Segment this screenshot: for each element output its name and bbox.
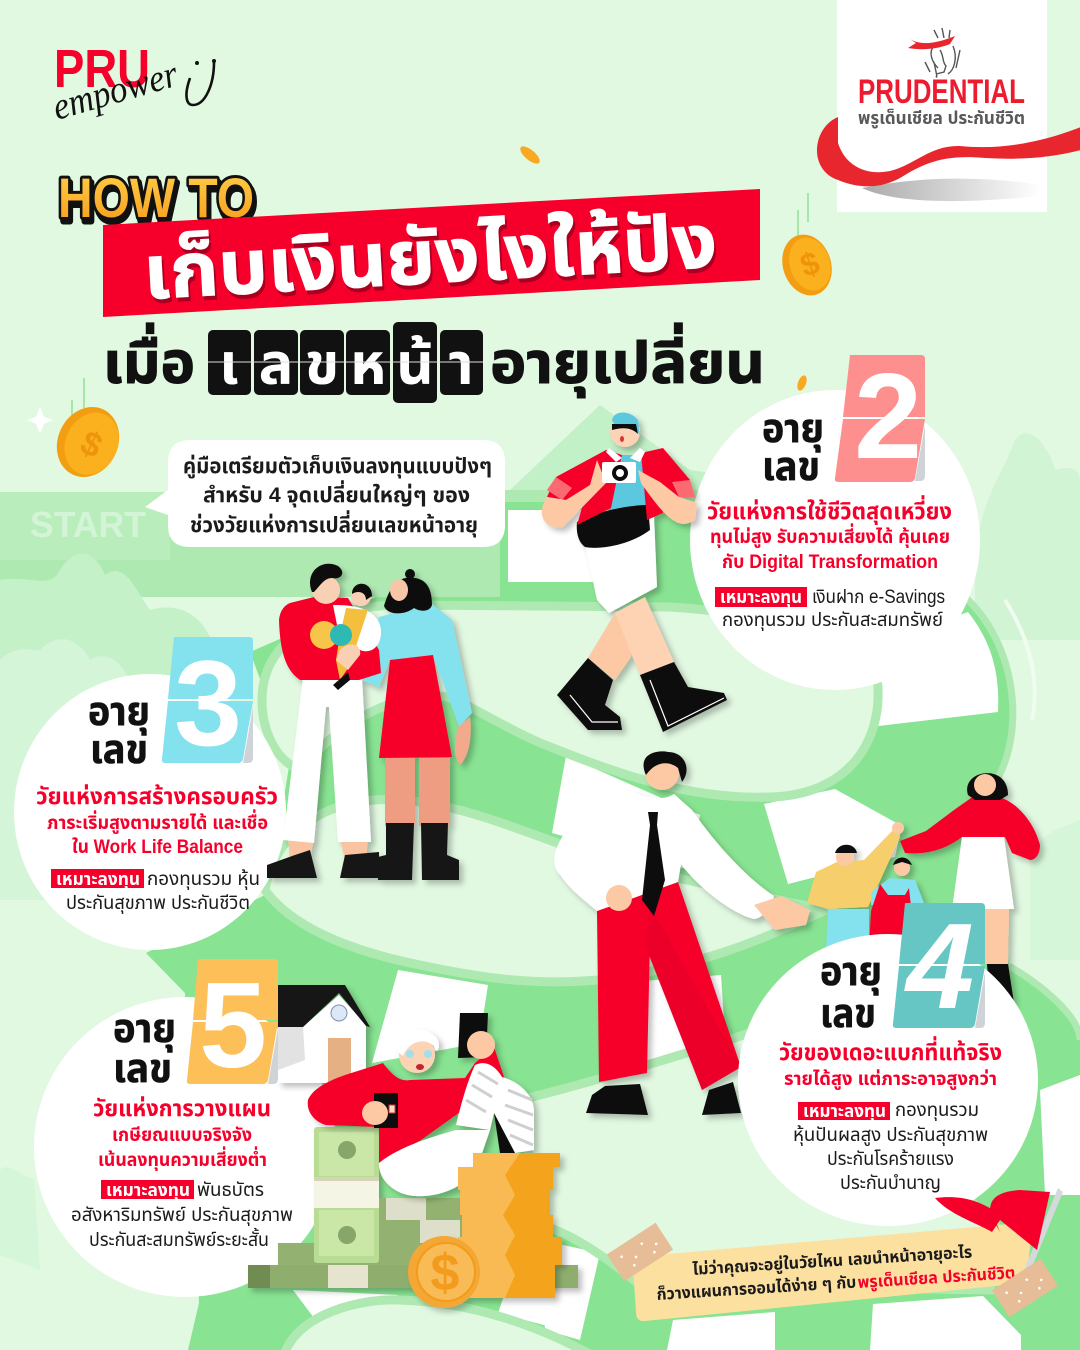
- panel: age 4: อายุ: [820, 950, 882, 996]
- icon: tape right: [992, 1259, 1058, 1317]
- road island lower: [520, 1020, 1000, 1290]
- flip card 2: 2: [854, 348, 922, 484]
- road island upper: [262, 605, 878, 797]
- decorative coins: [27, 143, 839, 487]
- speech bubble: intro: คู่มือเตรียมตัวเก็บเงินลงทุนแบบปังๆ: [183, 455, 492, 479]
- background scenery: mountain, trees and start band: [0, 405, 1080, 1270]
- panel: age 4: เลข: [820, 992, 876, 1036]
- figure: coin stacks: [408, 1153, 562, 1308]
- panel: age 4: กองทุนรวม: [895, 1100, 979, 1121]
- panel: age 4: [779, 898, 1002, 1194]
- panel: age 5: พันธบัตร: [197, 1180, 264, 1201]
- panel: age 5: เกษียณแบบจริงจัง: [112, 1125, 252, 1146]
- figure: woman with two children: [807, 773, 1040, 1003]
- callout: closing banner: ไม่ว่าคุณจะอยู่ในวัยไหน เลขนำหน้าอายุอะไร: [692, 1243, 973, 1280]
- man holding child: [267, 564, 381, 878]
- board game road: [146, 490, 1080, 1350]
- title banner: เก็บเงินยังไงให้ปัง: [141, 199, 719, 316]
- icon: coin left: $: [75, 423, 108, 466]
- panel: age 2: เลข: [762, 445, 820, 489]
- panel: age 4: รายได้สูง แต่ภาระอาจสูงกว่า: [784, 1068, 997, 1090]
- figure: house: [278, 985, 370, 1083]
- panel: age 2: วัยแห่งการใช้ชีวิตสุดเหวี่ยง: [707, 495, 952, 525]
- bubble: age 4: [738, 934, 1038, 1226]
- icon: coin right: $: [796, 244, 824, 284]
- speech bubble: intro: ช่วงวัยแห่งการเปลี่ยนเลขหน้าอายุ: [190, 510, 478, 538]
- logo: PRU empower U: PRU: [54, 39, 150, 99]
- panel: age 3: วัยแห่งการสร้างครอบครัว: [36, 783, 278, 809]
- flip tiles: น้: [396, 332, 434, 397]
- panel: age 5: เน้นลงทุนความเสี่ยงต่ำ: [98, 1146, 267, 1171]
- panel: age 3: เลข: [90, 728, 148, 772]
- panel: age 3: ภาระเริ่มสูงตามรายได้ และเชื่อ: [47, 809, 268, 834]
- icon: upright banknotes: [314, 1127, 379, 1263]
- panel: age 5: เลข: [113, 1047, 172, 1091]
- road island bottom: [283, 1300, 600, 1350]
- callout: closing banner: ก็วางแผนการออมได้ง่าย ๆ กับ: [656, 1273, 857, 1304]
- panel: age 4: ประกันโรคร้ายแรง: [827, 1147, 954, 1170]
- speech bubble: intro: [145, 440, 505, 547]
- panel: age 4: วัยของเดอะแบกที่แท้จริง: [779, 1036, 1002, 1065]
- icon: ribbon: [817, 117, 1080, 201]
- panel: age 3: [36, 635, 278, 914]
- panel: age 3: กองทุนรวม หุ้น: [147, 867, 260, 890]
- panel: age 2: กับ Digital Transformation: [722, 552, 938, 573]
- panel: age 5: ประกันสะสมทรัพย์ระยะสั้น: [89, 1227, 269, 1251]
- panel: age 2: เหมาะลงทุน: [720, 587, 802, 608]
- bubble: age 2: [690, 390, 980, 690]
- subtitle with flip tiles: อายุเปลี่ยน: [490, 322, 765, 398]
- panel: age 2: ทุนไม่สูง รับความเสี่ยงได้ คุ้นเคย: [710, 523, 950, 548]
- bubble: age 3: [14, 674, 286, 950]
- start label: START: [30, 504, 146, 545]
- panel: age 5: อสังหาริมทรัพย์ ประกันสุขภาพ: [71, 1205, 293, 1226]
- flip tiles: ล: [259, 332, 293, 397]
- flip card 5: 5: [199, 957, 267, 1093]
- panel: age 3: ประกันสุขภาพ ประกันชีวิต: [66, 893, 250, 914]
- panel: age 4: ประกันบำนาญ: [840, 1173, 941, 1194]
- panel: age 2: กองทุนรวม ประกันสะสมทรัพย์: [722, 610, 943, 631]
- bubble: age 5: [34, 997, 336, 1297]
- panel: age 3: ใน Work Life Balance: [72, 837, 243, 858]
- panel: age 3: อายุ: [88, 690, 150, 736]
- flip tiles: า: [448, 332, 474, 397]
- panel: age 5: เหมาะลงทุน: [106, 1180, 190, 1201]
- road island middle: [265, 800, 826, 982]
- panel: age 5: [71, 957, 293, 1251]
- panel: age 5: วัยแห่งการวางแผน: [93, 1095, 271, 1121]
- flip card 3: 3: [174, 635, 242, 771]
- callout: closing banner: พรูเด็นเชียล ประกันชีวิต: [857, 1264, 1016, 1293]
- panel: age 2: อายุ: [762, 407, 824, 453]
- icon: red flag: [935, 1188, 1063, 1272]
- speech bubble: intro: สำหรับ 4 จุดเปลี่ยนใหญ่ๆ ของ: [203, 480, 470, 508]
- flip tiles: เ: [219, 332, 239, 397]
- figure: photographer: [542, 412, 727, 732]
- panel: Prudential logo: [817, 0, 1080, 212]
- flip tiles: ข: [305, 332, 339, 397]
- figure: money stacks: [248, 1127, 578, 1288]
- subtitle with flip tiles: [103, 322, 765, 403]
- subtitle with flip tiles: เมื่อ: [103, 322, 195, 396]
- icon: coin left: [46, 397, 130, 487]
- panel: Prudential logo: พรูเด็นเชียล ประกันชีวิต: [858, 108, 1025, 129]
- flip card 4: 4: [903, 898, 974, 1034]
- callout: closing banner: [607, 1188, 1063, 1321]
- panel: age 4: เหมาะลงทุน: [803, 1101, 886, 1122]
- figure: office man: [554, 751, 810, 1115]
- panel: Prudential logo: PRUDENTIAL: [858, 73, 1025, 111]
- panel: age 2: [707, 348, 952, 631]
- panel: age 2: เงินฝาก e-Savings: [812, 587, 945, 608]
- icon: Prudence head: [908, 28, 960, 77]
- title: how to: HOW TO: [58, 166, 254, 229]
- figure: elderly man: [308, 1013, 534, 1196]
- figure: family: [267, 564, 472, 880]
- icon: big dollar coin: $: [431, 1244, 460, 1302]
- panel: age 3: เหมาะลงทุน: [56, 869, 140, 890]
- icon: coin right: [775, 228, 839, 302]
- panel: age 5: อายุ: [113, 1007, 176, 1053]
- woman: [362, 569, 472, 880]
- icon: big dollar coin: [408, 1236, 480, 1308]
- title: how to: HOW TO: [60, 170, 256, 233]
- logo: PRU empower U: empower: [48, 53, 183, 129]
- panel: age 4: หุ้นปันผลสูง ประกันสุขภาพ: [793, 1123, 988, 1147]
- title banner: เก็บเงินยังไงให้ปัง: [143, 203, 721, 320]
- icon: tape left: [607, 1223, 673, 1281]
- flip tiles: ห: [350, 332, 386, 397]
- flip tiles: [208, 322, 483, 403]
